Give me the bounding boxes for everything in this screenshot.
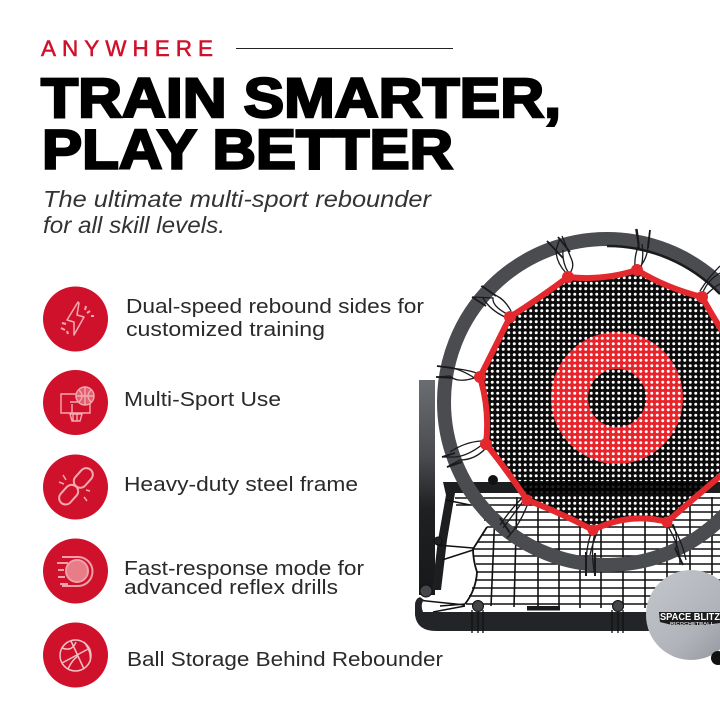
feature 4 text: advanced reflex drills <box>124 577 338 599</box>
feature 2 text: Multi-Sport Use <box>124 389 281 411</box>
title: PLAY BETTER <box>42 118 453 180</box>
icon: fast wheel <box>43 538 108 604</box>
back bar of base <box>432 482 720 590</box>
feature 1 <box>43 286 424 352</box>
base net <box>417 497 720 612</box>
red net border <box>480 270 720 530</box>
feature 3 <box>43 454 358 520</box>
icon: chain link <box>43 454 108 520</box>
feature 3 text: Heavy-duty steel frame <box>124 474 358 496</box>
frame connectors <box>420 476 624 633</box>
rebound net <box>484 274 720 525</box>
bungee cords <box>436 229 720 576</box>
circular ring frame <box>444 239 720 565</box>
feature 1 text: Dual-speed rebound sides for <box>126 296 424 318</box>
feature 5 <box>43 622 443 688</box>
feature 1 text: customized training <box>126 319 325 341</box>
feature 4 <box>43 538 364 604</box>
rear frame post <box>419 380 435 595</box>
feature 5 text: Ball Storage Behind Rebounder <box>127 649 443 671</box>
net corner tabs <box>474 264 708 536</box>
title <box>41 66 561 180</box>
icon: basketball hoop <box>43 370 108 435</box>
subtitle: for all skill levels. <box>43 212 225 238</box>
ball: RICOCHETBALL <box>670 621 714 626</box>
title: TRAIN SMARTER, <box>41 66 561 129</box>
feature 2 <box>43 370 281 435</box>
ball <box>646 570 720 665</box>
base frame <box>415 597 660 631</box>
subtitle <box>43 186 432 238</box>
icon: basketball <box>43 622 108 688</box>
product photo: rebounder <box>415 229 720 665</box>
subtitle: The ultimate multi-sport rebounder <box>43 186 432 212</box>
feature 4 text: Fast-response mode for <box>124 558 364 580</box>
net target ring <box>551 332 683 464</box>
icon: lightning bolt <box>43 286 108 352</box>
eyebrow: ANYWHERE: ANYWHERE <box>41 36 213 61</box>
